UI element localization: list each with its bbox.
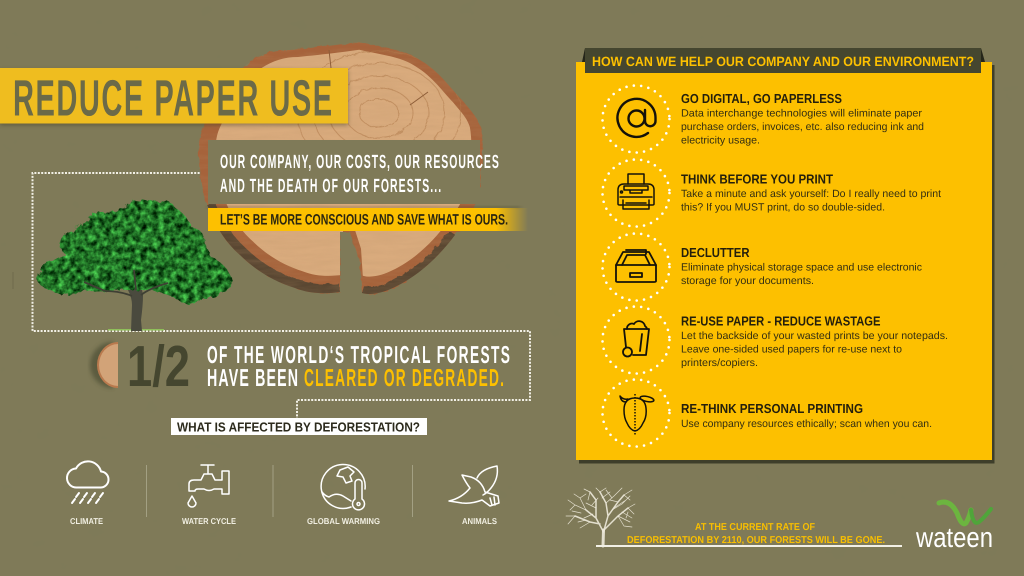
- logo: wateen: wateen: [915, 522, 993, 553]
- body text: [681, 262, 922, 287]
- text: have been: HAVE BEEN: [207, 365, 298, 392]
- item: re-think personal printing: [602, 380, 932, 446]
- heading: RE-THINK PERSONAL PRINTING: [681, 401, 863, 416]
- label: global warming: GLOBAL WARMING: [307, 516, 380, 526]
- label: water cycle: WATER CYCLE: [182, 516, 236, 526]
- body text: purchase orders, invoices, etc. also reducing ink and: [681, 121, 924, 133]
- icon: global warming: [321, 464, 365, 510]
- body text: printers/copiers.: [681, 357, 758, 369]
- item: declutter: [602, 234, 922, 300]
- dotted connector frame: [32, 173, 530, 418]
- icon: tree slice: [195, 40, 485, 300]
- icon: angel devil head: [620, 394, 654, 435]
- text: cleared or degraded: CLEARED OR DEGRADED.: [304, 365, 504, 392]
- body text: Leave one-sided used papers for re-use next to: [681, 344, 902, 356]
- body text: this? If you MUST print, do so double-sided.: [681, 202, 885, 214]
- label: animals: ANIMALS: [462, 516, 497, 526]
- icon: climate cloud: [67, 461, 109, 503]
- callout: be more conscious: [208, 206, 528, 231]
- body text: electricity usage.: [681, 134, 760, 146]
- callout: be more conscious: LET’S BE MORE CONSCIOUS AND SAVE WHAT IS OURS.: [220, 212, 508, 228]
- heading: GO DIGITAL, GO PAPERLESS: [681, 91, 842, 106]
- heading: RE-USE PAPER - REDUCE WASTAGE: [681, 314, 881, 328]
- text: death of forests: AND THE DEATH OF OUR FORESTS...: [220, 176, 441, 197]
- header ribbon: [582, 48, 985, 73]
- icon: green tree: [37, 200, 232, 331]
- item: go digital: [602, 86, 924, 152]
- item: re-use paper: [602, 306, 948, 374]
- label: what is affected: WHAT IS AFFECTED BY DEFORESTATION?: [177, 420, 420, 434]
- icon: printer: [618, 174, 654, 209]
- body text: [681, 108, 924, 146]
- icon: water cycle tap: [188, 465, 229, 507]
- icon: paper bin: [623, 321, 649, 356]
- text: tropical forests: OF THE WORLD‘S TROPICAL FORESTS: [207, 342, 510, 369]
- footer: bare tree: [566, 488, 635, 546]
- affected dividers: [146, 465, 412, 517]
- icon: at sign: [618, 99, 656, 137]
- number: one half: 1/2: [127, 334, 190, 399]
- footer: base line: [596, 545, 902, 547]
- footer: deforestation text: [627, 522, 885, 546]
- body text: Eliminate physical storage space and use electronic: [681, 262, 922, 274]
- body text: [681, 330, 948, 369]
- heading: DECLUTTER: [681, 245, 750, 260]
- text: our company: OUR COMPANY, OUR COSTS, OUR RESOURCES: [220, 152, 499, 173]
- icon: tray: [616, 250, 656, 282]
- body text: Let the backside of your wasted prints be your notepads.: [681, 330, 948, 342]
- icon: half log: [90, 342, 118, 388]
- footer: deforestation text: AT THE CURRENT RATE OF: [695, 522, 815, 533]
- header ribbon: HOW CAN WE HELP OUR COMPANY AND OUR ENVIRONMENT?: [592, 54, 974, 69]
- panel: company message: [208, 140, 499, 204]
- body text: [681, 188, 941, 214]
- body text: Data interchange technologies will eliminate paper: [681, 108, 923, 120]
- footer: deforestation text: DEFORESTATION BY 2110, OUR FORESTS WILL BE GONE.: [627, 535, 885, 546]
- item: think before you print: [602, 160, 941, 226]
- icon: animals bird: [449, 466, 499, 506]
- logo: wateen: [915, 502, 993, 553]
- panel: how can we help: [576, 48, 994, 464]
- body text: storage for your documents.: [681, 275, 814, 287]
- body text: Take a minute and ask yourself: Do I really need to print: [681, 188, 941, 200]
- label: climate: CLIMATE: [70, 516, 103, 526]
- body text: Use company resources ethically; scan when you can.: [681, 418, 932, 430]
- title banner: REDUCE PAPER USE: [13, 70, 332, 126]
- heading: THINK BEFORE YOU PRINT: [681, 172, 833, 186]
- statistic: half of tropical forests: [90, 334, 510, 399]
